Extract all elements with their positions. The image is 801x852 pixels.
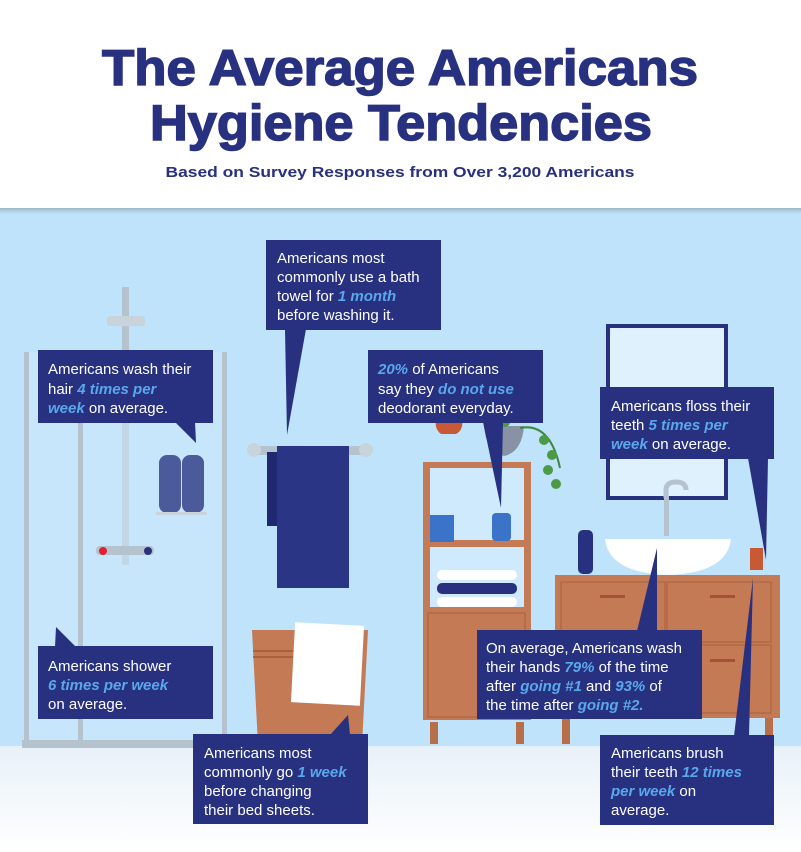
- callout: hair: [38, 350, 213, 443]
- callout: hand washing: their hands 79% of the time: [486, 659, 669, 676]
- illustration: towel on bar: [247, 443, 373, 588]
- callout: shower: Americans shower: [48, 658, 171, 675]
- callout: hair: week on average.: [48, 400, 168, 417]
- callout: shower: [38, 627, 213, 719]
- title: Hygiene Tendencies: [150, 95, 652, 151]
- callout: bath towel: before washing it.: [277, 307, 395, 324]
- illustration: laundry basket: [252, 622, 368, 745]
- callout: deodorant: [368, 350, 543, 508]
- callout: bath towel: [266, 240, 441, 435]
- callout: bed sheets: Americans most: [204, 745, 312, 762]
- callout: brushing: average.: [611, 802, 669, 819]
- callout: hair: hair 4 times per: [48, 381, 158, 398]
- callout: floss: teeth 5 times per: [611, 417, 729, 434]
- background wall: [0, 208, 801, 748]
- callout: bath towel: Americans most: [277, 250, 385, 267]
- callout: shower: on average.: [48, 696, 127, 713]
- title: The Average Americans: [102, 40, 698, 96]
- callout: bath towel: commonly use a bath: [277, 269, 420, 286]
- callout: floss: week on average.: [611, 436, 731, 453]
- illustration: vanity and sink: [555, 482, 780, 744]
- callout: hand washing: after going #1 and 93% of: [486, 678, 663, 695]
- callout: hand washing: On average, Americans wash: [486, 640, 682, 657]
- callout: bed sheets: before changing: [204, 783, 312, 800]
- callout: bed sheets: their bed sheets.: [204, 802, 315, 819]
- illustration: shelf unit: [423, 406, 531, 744]
- callout: bath towel: towel for 1 month: [277, 288, 396, 305]
- illustration: shower: [22, 287, 230, 748]
- illustration: mirror: [608, 326, 726, 498]
- callout: brushing: Americans brush: [611, 745, 724, 762]
- callout: floss: [600, 387, 774, 560]
- callout: hand washing: [477, 548, 702, 719]
- callout: shower: 6 times per week: [48, 677, 169, 694]
- callout: hair: Americans wash their: [48, 361, 191, 378]
- subtitle: Based on Survey Responses from Over 3,200 Americans: [166, 164, 634, 181]
- callout: hand washing: the time after going #2.: [486, 697, 644, 714]
- callout: brushing: [600, 578, 774, 825]
- callout: bed sheets: commonly go 1 week: [204, 764, 347, 781]
- illustration: plant: [484, 417, 561, 489]
- callout: deodorant: deodorant everyday.: [378, 400, 514, 417]
- callout: floss: Americans floss their: [611, 398, 750, 415]
- callout: brushing: per week on: [610, 783, 696, 800]
- callout: bed sheets: [193, 715, 368, 824]
- callout: brushing: their teeth 12 times: [611, 764, 742, 781]
- callout: deodorant: 20% of Americans: [377, 361, 499, 378]
- title: [102, 40, 698, 151]
- callout: deodorant: say they do not use: [378, 381, 514, 398]
- floor: [0, 746, 801, 852]
